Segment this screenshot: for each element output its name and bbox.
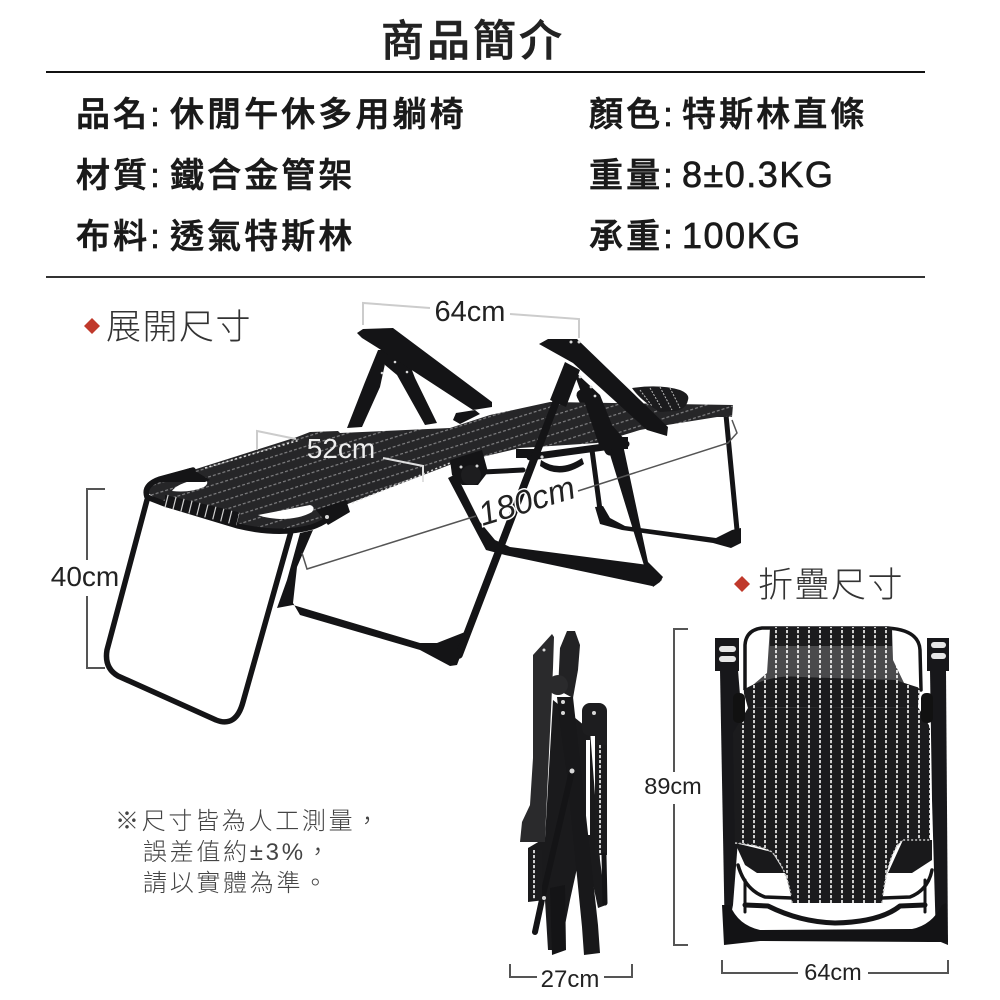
spec: load: 承重:: [589, 218, 676, 256]
dimension: height 40cm: 40cm: [51, 561, 119, 592]
spec: colour: 顏色:: [589, 96, 676, 134]
dimension: armrest width 64cm: [363, 296, 579, 338]
note: measurement tolerance: [115, 808, 382, 897]
folded seat fabric: [733, 707, 930, 903]
folded chair side view: [520, 631, 607, 955]
dimension: folded width 64cm: 64cm: [804, 959, 862, 985]
spec: colour: [589, 96, 868, 134]
spec: material: 鐵合金管架: [170, 157, 356, 195]
spec: material: 材質:: [76, 157, 163, 195]
right cut-out: [258, 505, 314, 519]
spec: weight: 8±0.3KG: [682, 154, 834, 195]
front legs: [106, 500, 480, 722]
pillow: [632, 386, 688, 412]
left corner: [158, 468, 210, 482]
side hinge: [548, 675, 568, 695]
dimension: length 180cm: [302, 420, 737, 569]
foot loop: [738, 865, 932, 898]
dimension: folded height 89cm: 89cm: [644, 773, 702, 799]
main diagonal leg: [459, 362, 580, 655]
dimension: armrest width 64cm: 64cm: [435, 296, 505, 328]
hinge and cross bars: [450, 410, 628, 485]
base frame: [722, 903, 948, 945]
dimension: folded width 64cm: [722, 959, 948, 985]
spec: product name: 品名:: [76, 96, 163, 134]
dimension: height 40cm: [51, 489, 119, 668]
dimension: length 180cm: 180cm: [474, 468, 579, 533]
heading: unfolded size: 展開尺寸: [106, 308, 252, 347]
right armrest: [539, 339, 668, 436]
note: measurement tolerance: 誤差值約±3%，: [143, 839, 332, 866]
armrest ends with rollers: [715, 638, 949, 671]
hinge knobs: [733, 693, 933, 723]
side long bar: [557, 697, 600, 955]
spec: colour: 特斯林直條: [682, 96, 868, 134]
upper back fabric: [747, 627, 905, 690]
rear legs: [448, 395, 741, 587]
spec: weight: [589, 154, 834, 195]
spec: fabric: 透氣特斯林: [170, 218, 356, 256]
side curved frame: [558, 631, 580, 698]
side cross bars: [533, 648, 574, 955]
dimension: folded height 89cm: [644, 629, 702, 945]
spec: material: [76, 157, 356, 195]
spec: fabric: 布料:: [76, 218, 163, 256]
dimension: seat width 52cm: [257, 431, 423, 482]
front strap: [165, 495, 238, 526]
seat edge hems: [735, 840, 930, 903]
unfolded chair photo: [106, 328, 741, 722]
note: measurement tolerance: 請以實體為準。: [143, 870, 330, 897]
spec: load: [589, 215, 802, 256]
side armrest: [520, 634, 554, 842]
spec: weight: 重量:: [589, 157, 676, 195]
fabric edge stitching: [205, 440, 450, 503]
heading: folded size: 折疊尺寸: [758, 566, 904, 605]
rear fabric under cut-outs: [735, 840, 932, 873]
note: measurement tolerance: ※尺寸皆為人工測量，: [115, 808, 382, 835]
folded chair front view: [715, 627, 949, 945]
spec table: [46, 71, 925, 278]
spec: product name: 休閒午休多用躺椅: [170, 96, 467, 134]
dimension: folded depth 27cm: [510, 964, 632, 993]
right arm supports: [573, 370, 625, 448]
spec: fabric: [76, 218, 356, 256]
spec: load: 100KG: [682, 215, 802, 256]
left armrest: [357, 328, 492, 410]
pillow front: [743, 677, 920, 708]
dimension: seat width 52cm: 52cm: [307, 433, 375, 464]
left cut-out: [172, 479, 207, 492]
seat fabric: [144, 402, 733, 532]
seat frame: [146, 470, 345, 531]
side frames: [720, 670, 948, 945]
side inner frame: [528, 700, 606, 950]
title: 商品簡介: [381, 18, 565, 66]
side strap: [582, 703, 607, 903]
dimension: folded depth 27cm: 27cm: [541, 966, 599, 993]
right corner: [316, 500, 350, 525]
top loop frame: [745, 628, 921, 690]
curved lower rod: [745, 905, 925, 923]
left arm supports: [347, 345, 437, 428]
